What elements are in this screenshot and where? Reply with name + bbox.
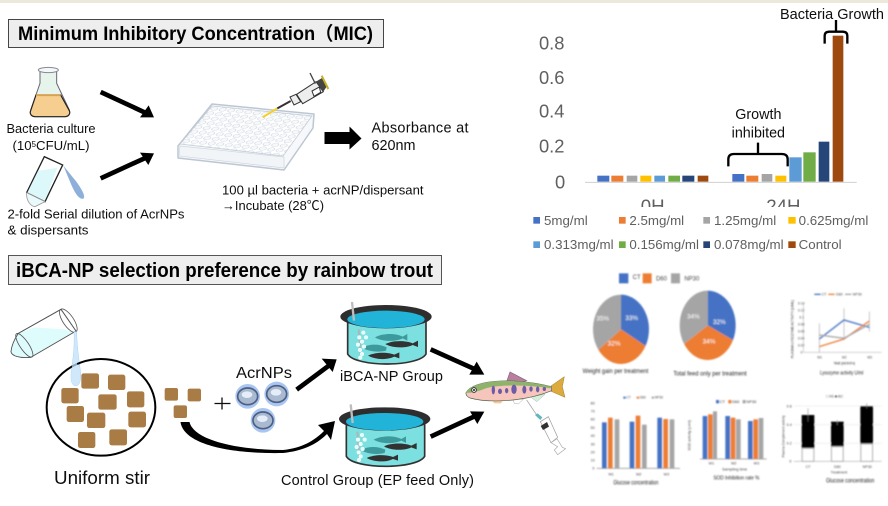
bar chart: glucose concentration: 20 — [591, 450, 595, 454]
plus sign — [214, 398, 230, 410]
bar chart: stacked complement activity: 0.4 — [787, 423, 792, 427]
pie chart: weight gain: Weight gain per treatment — [583, 368, 649, 375]
icon: stirring dish with feed — [47, 350, 155, 456]
bar chart: stacked complement activity: NP30 — [863, 465, 872, 469]
chart legend — [533, 213, 868, 252]
bar chart: stacked complement activity — [781, 395, 882, 484]
tank: iBCA-NP group — [340, 302, 432, 364]
text: serial dilution: 2-fold Serial dilution of AcrNPs — [8, 206, 185, 222]
line chart: lysozyme activity: 0.08 — [798, 322, 805, 326]
pie chart: total feed: 32% — [713, 319, 726, 326]
tank: control group — [339, 404, 430, 466]
y axis labels: 0 — [555, 172, 565, 193]
bar chart: SOD inhibition: Sampling time — [722, 467, 748, 472]
chart legend: 1.25mg/ml — [714, 213, 776, 228]
bracket: growth inhibited: inhibited — [732, 126, 785, 142]
line chart: lysozyme activity: 0.06 — [798, 329, 805, 333]
pie legend — [619, 273, 700, 283]
top band — [0, 0, 888, 3]
text: incubation protocol: →Incubate (28℃) — [222, 198, 324, 213]
bracket: bacteria growth: Bacteria Growth — [780, 7, 884, 23]
line chart: lysozyme activity: 0.14 — [798, 301, 805, 305]
text: bacteria culture — [6, 121, 96, 153]
chart legend: 0.625mg/ml — [799, 213, 868, 228]
curved arrow: pellets to control tank — [180, 421, 335, 453]
bars: 24H — [732, 36, 843, 182]
bar chart: glucose concentration: 40 — [591, 434, 595, 438]
bracket: growth inhibited — [728, 107, 788, 166]
line chart: lysozyme activity: Lysozyme activity U/ml — [820, 370, 863, 376]
text: incubation protocol — [222, 182, 424, 213]
x axis labels, clipped: 24H — [766, 195, 800, 216]
y axis labels: 0.4 — [539, 101, 564, 122]
bar chart: stacked complement activity: D60 — [834, 465, 841, 469]
icon: rainbow trout with syringe — [466, 372, 566, 455]
line chart: lysozyme activity: M1 — [817, 355, 822, 359]
line chart: lysozyme activity: PLASMA LYSOZYME ACTIVITY (U/ML) — [791, 300, 795, 358]
text: absorbance — [372, 120, 468, 154]
bar chart: SOD inhibition: SOD activity (u/ml) — [688, 420, 692, 451]
pie chart: weight gain: 33% — [625, 315, 638, 322]
bar chart: stacked complement activity: Plasma Complement activity — [781, 415, 785, 457]
line chart: lysozyme activity: TIME (MONTH) — [833, 362, 855, 366]
arrow: control tank to trout — [431, 411, 484, 437]
bar chart: glucose concentration: NP30 — [655, 396, 663, 400]
bar chart: SOD inhibition: W2 — [731, 462, 736, 466]
text: absorbance: 620nm — [372, 138, 416, 154]
text: bacteria culture: Bacteria culture — [6, 121, 96, 136]
pie chart: total feed: 34% — [703, 338, 716, 345]
bar chart: stacked complement activity: 0 — [789, 460, 791, 464]
bar chart: glucose concentration: D60 — [640, 396, 646, 400]
pie legend: NP30 — [684, 276, 700, 282]
bar chart: glucose concentration: 80 — [591, 401, 595, 405]
line chart: lysozyme activity: 0.1 — [799, 315, 804, 319]
bar chart: SOD inhibition: CT — [720, 399, 726, 404]
bar chart: stacked complement activity: □ H1 ■ AC — [826, 395, 843, 399]
arrow: NPs to iBCA tank — [297, 359, 337, 390]
bar chart: glucose concentration: 50 — [591, 426, 595, 430]
x axis labels, clipped: 0H — [641, 195, 665, 216]
text: bacteria culture: CFU/mL) — [36, 138, 90, 153]
icon: 96-well plate — [178, 104, 314, 170]
pie chart: total feed: Total feed only per treatment — [673, 370, 747, 377]
pie chart: weight gain: 35% — [596, 316, 609, 323]
pie chart: weight gain — [583, 295, 649, 375]
bar chart: glucose concentration: 60 — [591, 418, 595, 422]
pie chart: total feed: 34% — [687, 313, 700, 320]
text: uniform stir: Uniform stir — [54, 467, 150, 488]
bar chart: glucose concentration: W2 — [636, 472, 641, 476]
text: bacteria culture: (10 — [12, 138, 31, 153]
line chart: lysozyme activity: 0 — [801, 350, 803, 354]
bar chart: stacked complement activity: Glucose concentration — [826, 478, 874, 484]
bar chart: glucose concentration: 10 — [591, 459, 595, 463]
bar chart: SOD inhibition: W1 — [709, 462, 714, 466]
bar chart: SOD inhibition: D60 — [732, 399, 740, 404]
pie legend: CT — [633, 275, 641, 281]
heading: iBCA-NP selection preference: iBCA-NP selection preference by rainbow trout — [16, 260, 433, 282]
text: incubation protocol: 100 µl bacteria + acrNP/dispersant — [222, 182, 424, 198]
line chart: lysozyme activity: D60 — [836, 293, 843, 297]
chart legend: 5mg/ml — [544, 213, 588, 228]
line chart: lysozyme activity: 0.04 — [798, 336, 805, 340]
bar chart: SOD inhibition: SOD Inhibition rate % — [713, 475, 759, 481]
pie legend: D60 — [656, 276, 668, 282]
text: bacteria culture: 5 — [32, 140, 37, 149]
x axis labels, clipped — [641, 195, 800, 216]
bar chart: stacked complement activity: 0.6 — [787, 404, 792, 408]
bar chart: stacked complement activity: CT — [806, 465, 811, 469]
chart legend: 0.313mg/ml — [544, 237, 614, 252]
icon: nanoparticles — [235, 382, 289, 433]
bar chart: glucose concentration: W3 — [664, 472, 669, 476]
text: serial dilution: & dispersants — [8, 222, 89, 238]
y axis labels: 0.8 — [539, 32, 564, 53]
line chart: lysozyme activity: M2 — [842, 355, 847, 359]
bar chart: glucose concentration: 0 — [592, 467, 594, 471]
y axis labels — [539, 32, 565, 193]
arrow: iBCA tank to trout — [431, 349, 484, 375]
bars: 0H — [597, 176, 708, 182]
line chart: lysozyme activity: NP30 — [853, 293, 862, 297]
bar chart: glucose concentration: CT — [626, 396, 631, 400]
text: AcrNPs: AcrNPs — [236, 365, 292, 382]
line chart: lysozyme activity: CT — [822, 293, 827, 297]
line chart: lysozyme activity — [791, 293, 882, 376]
bar chart: SOD inhibition: W3 — [754, 462, 759, 466]
heading: Minimum Inhibitory Concentration (MIC): Minimum Inhibitory Concentration（MIC) — [18, 23, 373, 45]
bar chart: glucose concentration: 30 — [591, 442, 595, 446]
line chart: lysozyme activity: 0.12 — [798, 308, 805, 312]
bar chart: glucose concentration — [591, 396, 680, 487]
chart legend: 0.156mg/ml — [629, 237, 699, 252]
arrow: plate to absorbance — [324, 126, 362, 150]
bar chart: stacked complement activity: Treatment — [831, 471, 847, 475]
y axis labels: 0.2 — [539, 135, 564, 156]
arrow: dilution to plate — [101, 153, 154, 178]
bar chart: glucose concentration: W1 — [608, 472, 614, 476]
bar chart: stacked complement activity: 0.2 — [787, 442, 792, 446]
bar chart: SOD inhibition: NP30 — [746, 399, 757, 404]
bar chart: absorbance — [539, 7, 884, 216]
icon: feed pellets — [165, 388, 201, 418]
icon: pipette — [263, 73, 328, 117]
chart legend: 0.078mg/ml — [714, 237, 784, 252]
y axis labels: 0.6 — [539, 67, 564, 88]
chart legend: Control — [799, 237, 842, 252]
chart legend: 2.5mg/ml — [629, 213, 684, 228]
bar chart: glucose concentration: 70 — [591, 410, 595, 414]
text: serial dilution — [8, 206, 185, 238]
bracket: bacteria growth — [780, 7, 884, 44]
icon: dilution tube — [27, 157, 84, 207]
bar chart: SOD inhibition — [688, 399, 767, 481]
text: absorbance: Absorbance at — [372, 120, 468, 136]
icon: pouring tube — [11, 306, 81, 386]
text: iBCA-NP group: iBCA-NP Group — [340, 369, 443, 385]
line chart: lysozyme activity: M3 — [867, 355, 872, 359]
pie chart: weight gain: 32% — [608, 341, 621, 348]
bar chart: glucose concentration: Glucose concentration — [613, 481, 658, 487]
arrow: culture to plate — [101, 92, 154, 117]
pie chart: total feed — [673, 291, 747, 377]
line chart: lysozyme activity: 0.02 — [798, 343, 805, 347]
bracket: growth inhibited: Growth — [735, 107, 781, 123]
icon: culture flask — [30, 67, 70, 117]
text: control group: Control Group (EP feed Only) — [281, 473, 474, 489]
